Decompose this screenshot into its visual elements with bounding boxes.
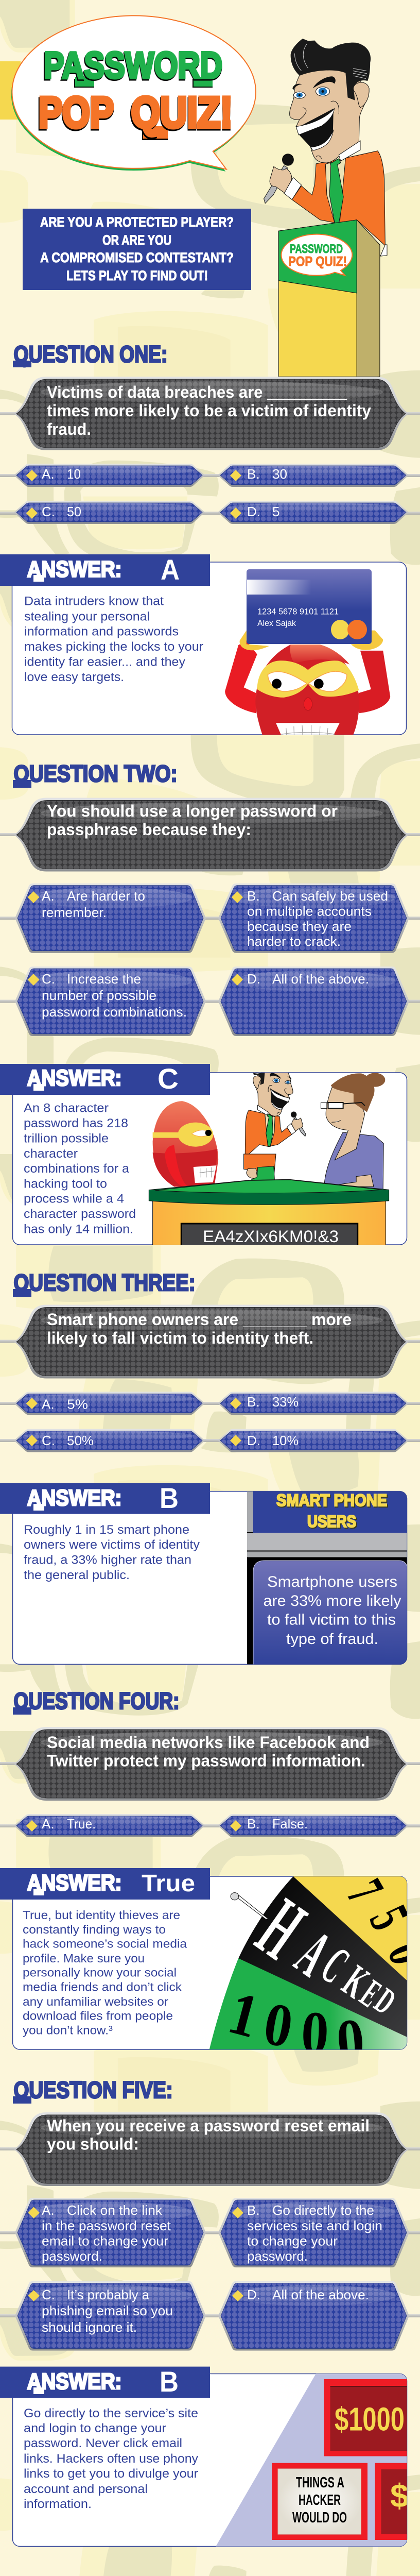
screen title (276, 1494, 388, 1529)
game show host illustration (264, 39, 387, 256)
wheel word: hacked: D (367, 1980, 403, 2022)
option D (218, 1429, 409, 1452)
panel: question two (0, 798, 420, 872)
option B: B. (247, 1394, 260, 1410)
option D (218, 967, 409, 1036)
answer five explanation: password. Never click email (24, 2436, 182, 2450)
wheel value: 750: 7 (336, 1870, 395, 1913)
option C: C. (42, 971, 55, 987)
option C: phishing email so you (42, 2303, 173, 2318)
option C (15, 967, 206, 1036)
option C: Increase the (67, 971, 141, 987)
option D: D. (247, 1433, 260, 1448)
option A (15, 884, 206, 953)
answer five explanation: Go directly to the service’s site (24, 2406, 198, 2420)
option C: should ignore it. (42, 2319, 137, 2335)
panel: answer three (12, 1491, 408, 1665)
option A (14, 1814, 205, 1837)
wheel value: 750 (348, 1877, 407, 1963)
hacker monster holding credit card (225, 631, 390, 735)
screen message: Smartphone users (267, 1573, 397, 1590)
answer two explanation: combinations for a (24, 1162, 129, 1176)
screen message: type of fraud. (286, 1631, 378, 1648)
option D (218, 501, 409, 524)
answer two explanation: character password (24, 1207, 136, 1221)
option B: Go directly to the (272, 2202, 374, 2218)
answer bar: C (0, 1062, 210, 1095)
answer two explanation: password has 218 (24, 1116, 128, 1130)
screen message: to fall victim to this (267, 1612, 396, 1628)
panel: question one: fraud. (47, 420, 91, 438)
option B: False. (272, 1816, 308, 1832)
option D: All of the above. (272, 2287, 369, 2302)
panel: question three: Smart phone owners are _______ more (47, 1310, 352, 1329)
panel: question five: you should: (47, 2135, 139, 2154)
game show scene (149, 1054, 389, 1246)
wheel word: hacked: K (334, 1956, 378, 2008)
panel: answer one (12, 562, 407, 735)
option B: Can safely be used (272, 888, 388, 904)
panel: question four: Social media networks like Facebook and (47, 1733, 370, 1752)
answer two explanation: character (24, 1147, 78, 1161)
answer options: question five (0, 2198, 420, 2350)
answer three explanation: owners were victims of identity (24, 1538, 200, 1552)
option A: True. (67, 1816, 96, 1832)
answer five explanation: information. (24, 2497, 92, 2511)
option A: 10 (67, 466, 81, 482)
option A: email to change your (42, 2233, 168, 2248)
title: password: PASSWORD (44, 45, 222, 87)
credit card: 1234 5678 9101 1121 (257, 607, 339, 616)
answer two explanation (24, 1101, 136, 1236)
option B (218, 1814, 409, 1837)
option A: A. (42, 466, 55, 482)
answer four explanation: True, but identity thieves are (23, 1908, 180, 1922)
heading: question one: QUESTION ONE: (13, 341, 168, 367)
panel: question three (0, 1304, 420, 1379)
answer options: question four (0, 1814, 420, 1837)
option A: 5% (67, 1397, 88, 1412)
option C: 50 (67, 504, 81, 519)
panel: answer two (12, 1054, 407, 1246)
podium (153, 1200, 386, 1245)
option A (14, 464, 205, 487)
answer four explanation: media friends and don’t click (23, 1980, 182, 1994)
prize wheel (209, 1876, 407, 2049)
heading: question three: QUESTION THREE: (13, 1269, 196, 1296)
answer three explanation: the general public. (24, 1568, 130, 1582)
panel: question one: Victims of data breaches are _________ (47, 383, 347, 401)
option B: B. (247, 888, 260, 904)
answer options: question three (0, 1392, 420, 1452)
option C: C. (42, 504, 55, 519)
option B: password. (247, 2248, 308, 2264)
option B: 33% (272, 1394, 299, 1410)
wheel pointer (231, 1893, 269, 1920)
answer two explanation: process while a 4 (24, 1192, 124, 1206)
answer four explanation: you don’t know.³ (23, 2024, 113, 2037)
option B (218, 2198, 409, 2267)
option B: to change your (247, 2233, 338, 2248)
answer five explanation: account and personal (24, 2482, 148, 2496)
title: pop quiz (38, 88, 233, 140)
answer bar: A (0, 553, 210, 586)
option C (14, 501, 205, 524)
option C: number of possible (42, 988, 156, 1003)
title: pop quiz: POP (38, 90, 114, 138)
option A: A. (42, 1816, 55, 1832)
panel: question four: Twitter protect my password information. (47, 1752, 365, 1770)
option C: password combinations. (42, 1004, 187, 1020)
answer one explanation: makes picking the locks to your (24, 640, 203, 654)
wheel value: 750: 5 (358, 1896, 420, 1939)
screen message: are 33% more likely (264, 1592, 401, 1609)
podium with logo: PASSWORD (290, 242, 343, 256)
wheel value: 1000: 0 (300, 1999, 330, 2067)
panel: question five: When you receive a password reset email (47, 2116, 370, 2135)
title: pop quiz: QUIZ! (131, 88, 233, 137)
answer options: question two (0, 884, 420, 1036)
panel: question two: passphrase because they: (47, 820, 251, 839)
screen title: SMART PHONE (276, 1491, 387, 1510)
option A: A. (42, 888, 55, 904)
answer bar: true (0, 1868, 210, 1900)
woman contestant (321, 1073, 385, 1190)
option C (14, 1429, 205, 1452)
answer three explanation (24, 1523, 200, 1582)
answer two explanation: has only 14 million. (24, 1223, 133, 1236)
answer one explanation: identity far easier... and they (24, 655, 186, 669)
host (245, 1073, 306, 1154)
option B: B. (247, 466, 260, 482)
answer four explanation: personally know your social (23, 1966, 177, 1979)
option A: in the password reset (42, 2218, 171, 2233)
option B (218, 884, 409, 953)
option B: harder to crack. (247, 934, 341, 949)
answer bar: C: ANSWER: (27, 1065, 121, 1091)
panel: question one: times more likely to be a victim of identity (47, 401, 371, 420)
option B: B. (247, 2202, 260, 2218)
answer options: question one (0, 464, 420, 524)
answer four explanation: any unfamiliar websites or (23, 1995, 168, 2008)
game board tiles: THINGS A (296, 2475, 344, 2491)
answer one explanation: Data intruders know that (24, 594, 164, 608)
answer four explanation: constantly finding ways to (23, 1923, 166, 1936)
option A (14, 1392, 205, 1415)
answer one explanation: stealing your personal (24, 609, 150, 623)
podium with logo (278, 220, 380, 377)
option B: B. (247, 1816, 260, 1832)
option D: D. (247, 2287, 260, 2302)
option C: C. (42, 2287, 55, 2302)
answer bar: B (0, 2365, 210, 2398)
wheel value: 1000: 0 (259, 1990, 297, 2061)
option B: on multiple accounts (247, 904, 372, 919)
game board tiles (216, 2374, 420, 2547)
wheel word: hacked: E (353, 1972, 389, 2015)
intro box: OR ARE YOU (102, 232, 171, 248)
option D: 10% (272, 1433, 299, 1448)
heading: question five: QUESTION FIVE: (13, 2077, 173, 2103)
option D: All of the above. (272, 971, 369, 987)
heading: question two: QUESTION TWO: (13, 760, 177, 787)
answer five explanation: and login to change your (24, 2421, 166, 2435)
option A: Are harder to (67, 888, 145, 904)
answer three explanation: fraud, a 33% higher rate than (24, 1553, 191, 1567)
intro box (23, 209, 251, 290)
answer five explanation: links. Hackers often use phony (24, 2452, 199, 2466)
answer two explanation: hacking tool to (24, 1177, 107, 1191)
password display: EA4zXIx6KM0!&3 (203, 1227, 339, 1246)
panel: answer four (12, 1876, 408, 2050)
panel: question one (0, 377, 420, 450)
credit card (247, 569, 372, 644)
monster contestant (153, 1101, 218, 1187)
screen message (264, 1573, 401, 1648)
answer bar: B: B (160, 1482, 179, 1514)
game board tiles: WOULD DO (292, 2510, 347, 2526)
option A (15, 2198, 206, 2267)
option B (218, 464, 409, 487)
option A: remember. (42, 905, 107, 920)
answer one explanation: love easy targets. (24, 670, 124, 684)
option D (218, 2281, 409, 2350)
wheel value: 1000 (230, 1996, 362, 2049)
option D: 5 (272, 504, 279, 519)
option A: password. (42, 2248, 102, 2264)
header: speech bubble with title (0, 15, 256, 172)
option C: C. (42, 1433, 55, 1448)
option A: A. (42, 1397, 55, 1412)
answer four explanation: profile. Make sure you (23, 1952, 145, 1965)
answer two explanation: trillion possible (24, 1131, 109, 1146)
credit card: Alex Sajak (257, 618, 296, 628)
screen title: SMART PHONE (277, 1492, 388, 1511)
intro box: ARE YOU A PROTECTED PLAYER? (40, 214, 234, 230)
podium with logo: POP QUIZ! (288, 253, 347, 269)
option C (15, 2281, 206, 2350)
answer bar: C: C (157, 1062, 179, 1095)
wheel word: hacked (253, 1897, 394, 2012)
answer one explanation (24, 594, 203, 684)
wheel word: hacked: H (241, 1880, 321, 1977)
wheel word: hacked: C (311, 1936, 360, 1995)
panel: answer five (12, 2374, 420, 2547)
answer bar: true: ANSWER: (27, 1870, 121, 1895)
screen title: USERS (308, 1513, 357, 1532)
game board tiles: HACKER (299, 2492, 341, 2509)
wheel word: hacked: A (284, 1917, 344, 1990)
intro box: A COMPROMISED CONTESTANT? (40, 250, 234, 265)
option D: D. (247, 504, 260, 519)
answer bar: true: True (142, 1870, 195, 1896)
title: pop quiz: QUIZ! (130, 90, 233, 138)
title: pop quiz: POP (39, 88, 114, 137)
answer bar: B: ANSWER: (27, 1485, 121, 1511)
title: password: PASSWORD (43, 46, 222, 88)
wheel value: 1000: 1 (222, 1979, 266, 2051)
answer three explanation: Roughly 1 in 15 smart phone (24, 1523, 189, 1537)
panel: question three: likely to fall victim to identity theft. (47, 1329, 313, 1347)
smart phone users screen (247, 1491, 408, 1665)
option B: because they are (247, 919, 352, 934)
option B: services site and login (247, 2218, 382, 2233)
option A: Click on the link (67, 2202, 163, 2218)
option D: D. (247, 971, 260, 987)
answer five explanation (24, 2406, 199, 2511)
intro box: LETS PLAY TO FIND OUT! (66, 268, 208, 283)
answer bar: B: ANSWER: (27, 2369, 121, 2394)
option C: It’s probably a (67, 2287, 150, 2302)
option B (218, 1392, 409, 1415)
option A: A. (42, 2202, 55, 2218)
answer bar: A: ANSWER: (27, 556, 121, 582)
answer bar: B: B (160, 2365, 179, 2398)
answer bar: A: A (161, 553, 180, 586)
heading: question four: QUESTION FOUR: (13, 1688, 179, 1714)
panel: question five (0, 2112, 420, 2186)
answer four explanation: hack someone’s social media (23, 1937, 187, 1951)
panel: question two: You should use a longer password or (47, 802, 338, 820)
answer bar: B (0, 1482, 210, 1514)
wheel value: 1000: 0 (334, 2006, 367, 2075)
answer five explanation: links to get you to divulge your (24, 2467, 198, 2481)
answer four explanation: download files from people (23, 2009, 173, 2023)
answer one explanation: information and passwords (24, 625, 179, 639)
answer two explanation: An 8 character (24, 1101, 109, 1115)
option C: 50% (67, 1433, 94, 1448)
panel: question four (0, 1727, 420, 1801)
screen title: USERS (307, 1512, 356, 1531)
answer four explanation (23, 1908, 187, 2037)
option B: 30 (272, 466, 287, 482)
